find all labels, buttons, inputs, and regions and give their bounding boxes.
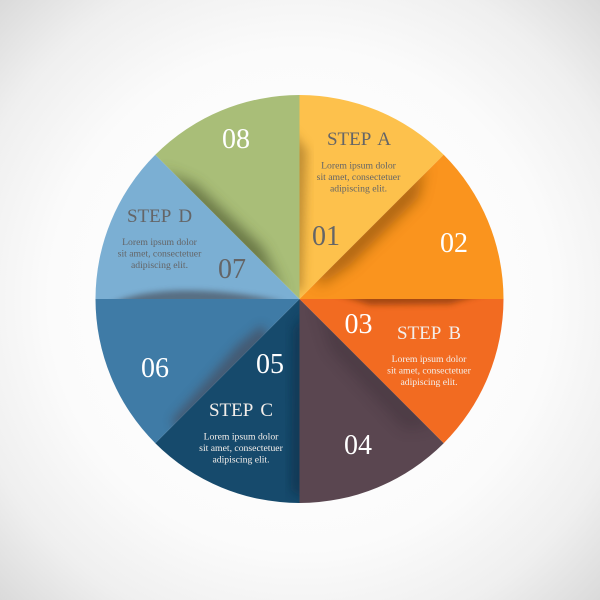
- step C heading: STEP C: [209, 400, 273, 421]
- slice 01: [290, 95, 444, 299]
- step B text: Lorem ipsum dolor: [392, 354, 467, 365]
- slice 08: [155, 95, 300, 299]
- number 07: 07: [218, 254, 246, 285]
- step B text: sit amet, consectetuer: [387, 366, 472, 376]
- step B text: adipiscing elit.: [400, 377, 458, 388]
- slice 03: [300, 292, 504, 443]
- step C text: adipiscing elit.: [212, 454, 270, 466]
- slice 04: [300, 299, 444, 503]
- number 03: 03: [344, 309, 372, 340]
- step D text: adipiscing elit.: [131, 260, 188, 271]
- number 05: 05: [256, 349, 284, 380]
- step D text: Lorem ipsum dolor: [122, 237, 198, 248]
- slice 02: [300, 155, 504, 299]
- step D heading: STEP D: [127, 206, 192, 227]
- number 06: 06: [141, 353, 169, 384]
- step A text: Lorem ipsum dolor: [321, 160, 397, 172]
- pie chart: [96, 95, 504, 503]
- slice 05: [155, 299, 305, 503]
- step C text: sit amet, consectetuer: [199, 443, 284, 454]
- step A text: sit amet, consectetuer: [317, 172, 401, 183]
- step A heading: STEP A: [327, 129, 391, 150]
- number 01: 01: [312, 221, 340, 252]
- slice 06: [96, 299, 300, 443]
- number 08: 08: [222, 124, 250, 155]
- number 04: 04: [344, 430, 372, 461]
- number 02: 02: [440, 228, 468, 259]
- step B heading: STEP B: [397, 323, 461, 344]
- step D text: sit amet, consectetuer: [118, 248, 202, 260]
- step C text: Lorem ipsum dolor: [204, 432, 279, 442]
- slice 07: [96, 155, 300, 306]
- step A text: adipiscing elit.: [330, 184, 387, 194]
